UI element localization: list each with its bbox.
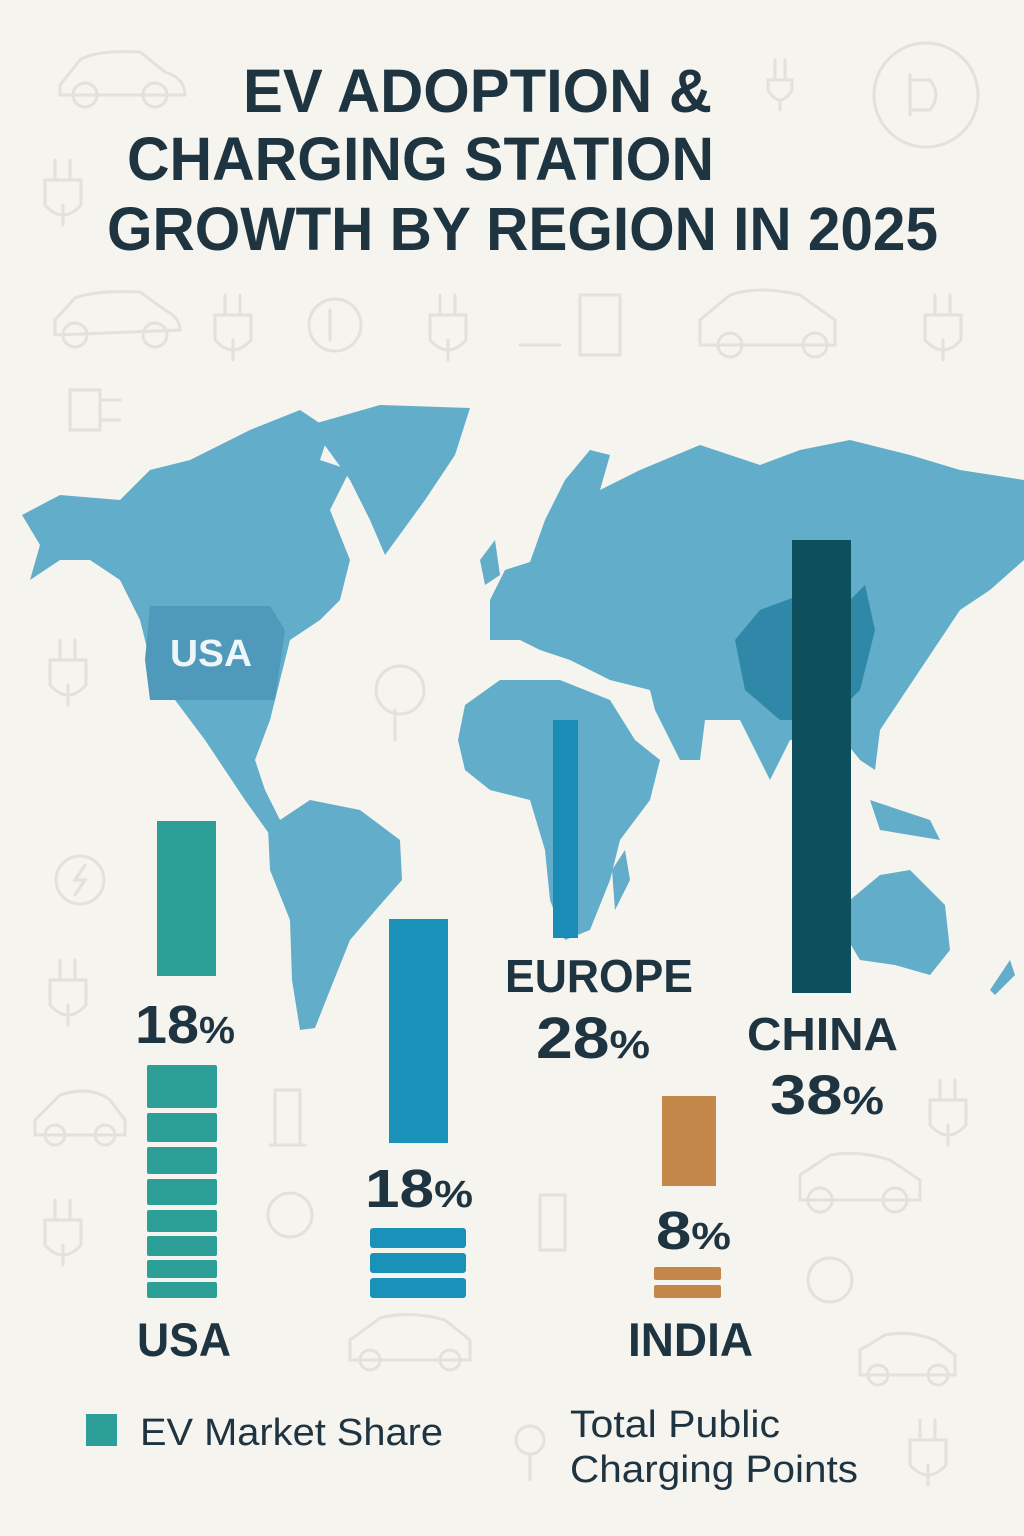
bar: USA EV market share	[157, 821, 216, 976]
label: 18%: 18%	[365, 1159, 473, 1219]
bar: China	[792, 540, 851, 993]
label: EUROPE 28%	[505, 950, 693, 1071]
greenland	[310, 405, 470, 555]
bar: second blue market share	[389, 919, 448, 1143]
stacked bar: USA charging points	[147, 1065, 217, 1298]
label: CHINA 38%	[747, 1008, 898, 1126]
stacked bar: blue charging points	[370, 1228, 466, 1298]
north america	[22, 410, 350, 835]
label: USA: USA	[137, 1313, 231, 1366]
legend: EV market share: EV Market Share	[140, 1412, 443, 1454]
legend: charging points	[570, 1404, 858, 1491]
title: CHARGING STATION	[127, 125, 714, 193]
world map	[22, 405, 1024, 1030]
africa	[458, 680, 660, 940]
legend: charging points: Charging Points	[570, 1449, 858, 1491]
label: EUROPE 28%: 28%	[536, 1006, 650, 1071]
title: EV ADOPTION &	[243, 57, 712, 125]
label: USA 18%: 18%	[135, 995, 235, 1055]
label: INDIA: INDIA	[628, 1313, 753, 1366]
highlight: USA region: USA	[170, 633, 252, 675]
title: GROWTH BY REGION IN 2025	[107, 195, 938, 263]
highlight: China region	[735, 585, 875, 720]
highlight: USA region	[145, 606, 285, 700]
label: CHINA 38%: CHINA	[747, 1008, 898, 1060]
bar: India	[662, 1096, 716, 1186]
uk	[480, 540, 500, 585]
eurasia	[490, 440, 1024, 780]
label: CHINA 38%: 38 %	[770, 1063, 884, 1126]
title	[107, 57, 938, 263]
label: EUROPE 28%: EUROPE	[505, 950, 693, 1002]
stacked bar: India charging points	[654, 1267, 721, 1298]
australia	[845, 870, 950, 975]
south america	[268, 800, 402, 1030]
label: India 8%: 8%	[656, 1201, 731, 1261]
bar: Europe	[553, 720, 578, 938]
legend: charging points: Total Public	[570, 1404, 780, 1446]
